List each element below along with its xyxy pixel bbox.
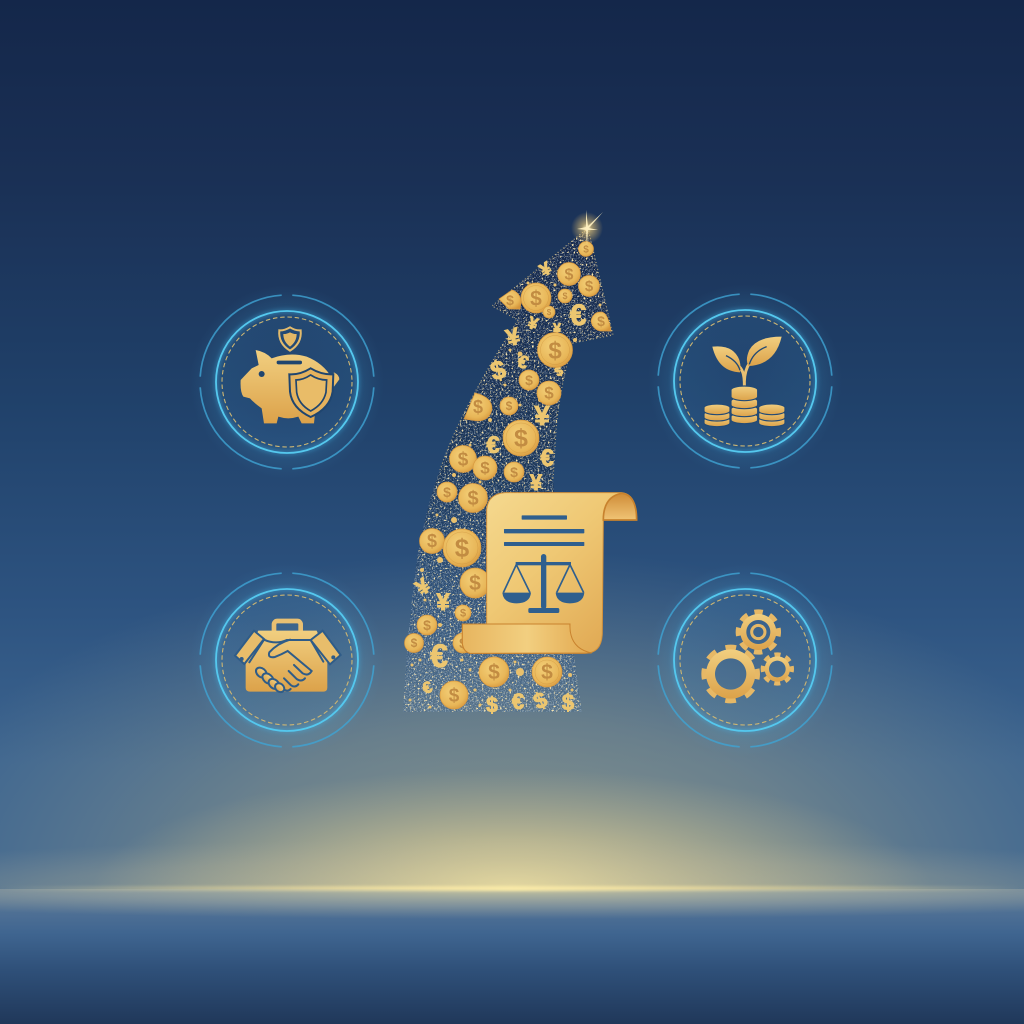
currency symbols: ¥: [534, 400, 550, 431]
currency symbols: €: [512, 689, 524, 714]
sparkle at arrow tip: [571, 210, 603, 245]
currency symbols: €: [540, 445, 554, 472]
background floor gradient: [0, 889, 1024, 1024]
currency symbols: ¥: [530, 470, 543, 495]
gold coins: $: [514, 424, 528, 452]
gold coins: $: [480, 458, 490, 478]
legal scroll with scales: [462, 493, 637, 653]
currency symbols: €: [420, 679, 435, 698]
gold coins: [404, 242, 611, 709]
gold coins: $: [459, 635, 467, 651]
arrow speckled body: [403, 228, 613, 712]
bottom roll: [462, 624, 592, 653]
currency symbols: $: [552, 362, 566, 379]
gold coins: $: [547, 308, 552, 317]
gold coins: $: [585, 278, 594, 295]
currency symbols: $: [562, 690, 574, 715]
floor reflection: [0, 889, 1024, 921]
gold coins: $: [458, 450, 469, 470]
horizon light line: [0, 886, 1024, 891]
gold coins: $: [423, 617, 431, 633]
gold coins: $: [548, 338, 562, 364]
currency symbols: ¥: [411, 572, 436, 600]
gold coins: $: [473, 397, 483, 417]
text lines: [504, 515, 584, 546]
currency symbols: $: [487, 354, 509, 386]
currency symbols: €: [486, 432, 500, 459]
gold coins: $: [449, 686, 460, 706]
horizon glow wide: [0, 500, 1024, 889]
gold coins: $: [469, 572, 481, 595]
emblem: gears: [648, 563, 842, 757]
currency symbols: ¥: [536, 258, 555, 280]
emblem: handshake over briefcase: [190, 563, 384, 757]
gold coins: $: [443, 484, 451, 500]
currency symbols: €: [515, 351, 531, 373]
gold coins: $: [565, 266, 574, 284]
currency symbols: $: [486, 694, 498, 717]
gold coins: $: [427, 531, 437, 551]
gold coins: $: [460, 608, 466, 620]
icon: balance scales: [502, 554, 584, 613]
gold coins: $: [506, 292, 514, 308]
gold coins: $: [525, 372, 533, 388]
gold coins: $: [544, 384, 554, 402]
emblem: plant growing from coins: [648, 284, 842, 478]
gold coins: $: [562, 291, 568, 301]
gold coins: $: [530, 288, 542, 310]
currency symbols: ¥: [525, 313, 541, 334]
gold coins: $: [597, 313, 605, 329]
gold coins: $: [411, 636, 418, 650]
gold coins: $: [488, 661, 500, 684]
gold coins: $: [510, 464, 518, 480]
currency symbols: €: [570, 299, 587, 332]
gold coins: $: [455, 533, 470, 563]
currency symbols: ¥: [553, 320, 561, 336]
gold coins: $: [541, 661, 553, 684]
currency symbols: ¥: [436, 589, 450, 616]
gold coins: $: [506, 399, 513, 413]
top curl: [603, 493, 637, 520]
emblem: piggy bank with shield: [190, 285, 384, 479]
scroll sheet: [462, 493, 637, 653]
central growth arrow made of coins: [403, 210, 613, 717]
gold coins: $: [467, 488, 479, 510]
icon: handshake briefcase: [235, 621, 341, 694]
horizon haze band: [0, 835, 1024, 889]
gold dust: [408, 282, 602, 708]
icon: three gears: [704, 612, 792, 701]
icon: piggy bank: [241, 327, 339, 423]
icon: sprout and coin stacks: [704, 337, 785, 427]
gold coins: $: [583, 244, 589, 256]
currency symbols: ¥: [503, 323, 524, 352]
currency symbols: $: [529, 687, 551, 714]
horizon glow core: [0, 760, 1024, 889]
currency symbols: [411, 258, 587, 717]
currency symbols: €: [430, 638, 448, 674]
